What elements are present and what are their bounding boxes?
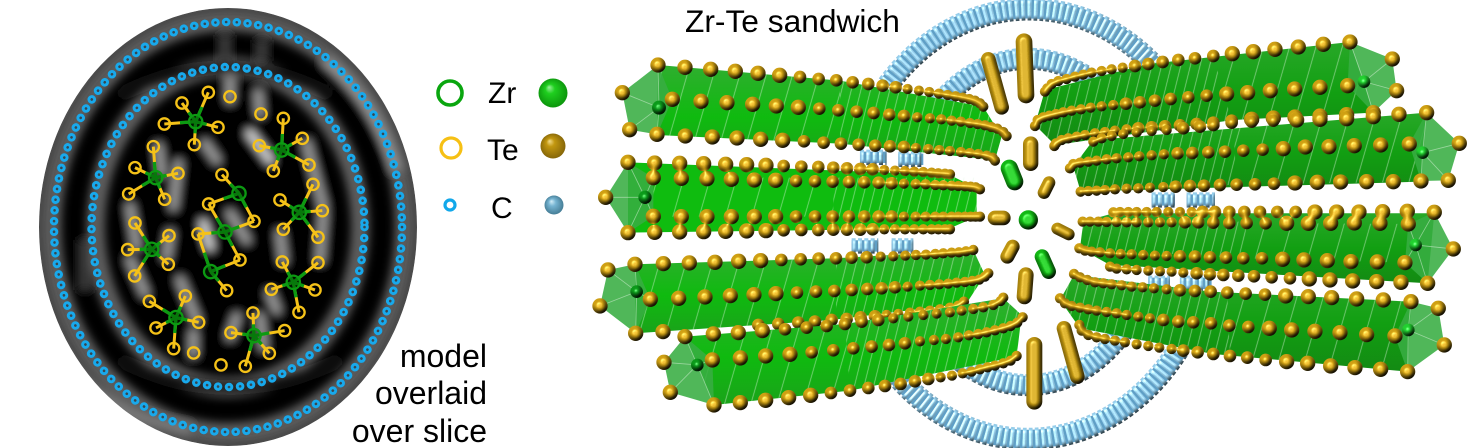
- chain H: bottom right: [1060, 274, 1444, 372]
- title: Zr-Te sandwich: Zr-Te sandwich: [685, 3, 900, 39]
- legend ball: C: [544, 196, 564, 214]
- right half: ZrTe chains: [1035, 42, 1459, 372]
- central Zr and Te atom columns seen end-on: [988, 42, 1077, 402]
- chain G: third right: [1079, 211, 1453, 283]
- chain B: middle left: [606, 162, 980, 233]
- legend label: C: C: [491, 192, 513, 225]
- Zr columns: [1009, 168, 1049, 272]
- chain E: upper right: [1035, 42, 1397, 146]
- inner carbon ring dots: [92, 67, 364, 387]
- legend symbol: C ring: [445, 200, 455, 210]
- slice: grayscale disc: [39, 8, 417, 446]
- legend symbol: Te ring: [441, 138, 461, 158]
- legend ball: Zr: [538, 78, 568, 108]
- legend: [438, 77, 568, 225]
- legend label: Te: Te: [487, 134, 519, 167]
- chain C: lower left: [600, 250, 988, 333]
- chain D: bottom left: [664, 298, 1023, 405]
- panel: model overlaid over tomographic slice: [39, 8, 417, 446]
- legend label: Zr: Zr: [488, 77, 516, 110]
- ZrTe model overlay: [122, 87, 328, 372]
- caption: model overlaid over slice: over slice: [352, 413, 487, 448]
- chain A: upper left: [622, 65, 1007, 161]
- panel: Zr-Te sandwich 3D structure: [600, 9, 1459, 439]
- legend symbol: Zr ring: [438, 81, 462, 105]
- caption: model overlaid over slice: [352, 338, 487, 448]
- caption: model overlaid over slice: overlaid: [375, 375, 487, 411]
- outer carbon ring dots: [54, 22, 402, 432]
- caption: model overlaid over slice: model: [400, 338, 487, 374]
- carbon nanotube rings: [852, 9, 1215, 439]
- Te columns: [988, 42, 1077, 402]
- left half: ZrTe chains: [600, 65, 1023, 405]
- chain F: second right: [1070, 113, 1459, 192]
- legend ball: Te: [540, 134, 566, 158]
